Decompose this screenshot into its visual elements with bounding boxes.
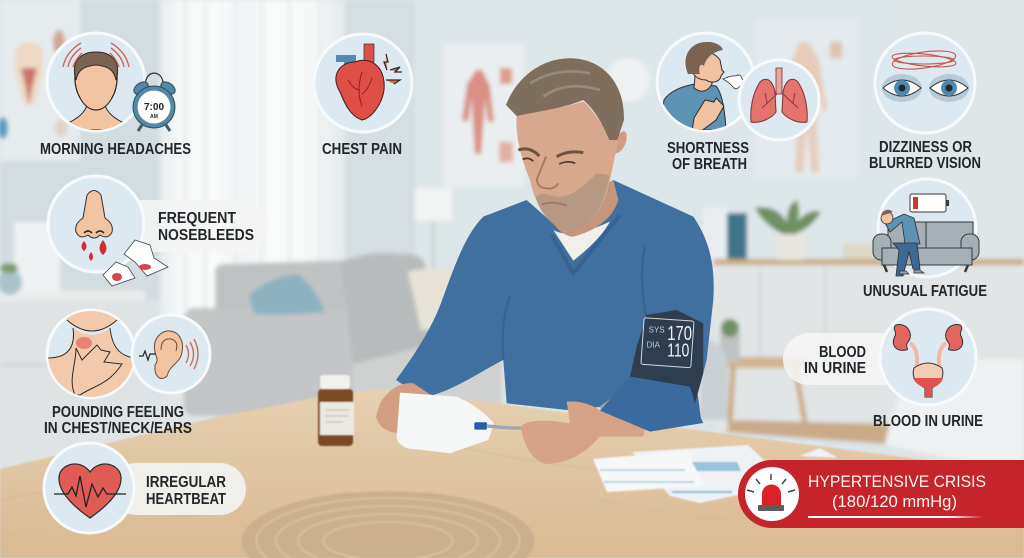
icon: blurred eyes xyxy=(875,33,975,133)
label: MORNING HEADACHES xyxy=(40,141,191,158)
icon: heart with ECG xyxy=(44,443,134,533)
symptom: frequent nosebleeds xyxy=(48,176,268,286)
threshold: (180/120 mmHg) xyxy=(832,493,957,511)
white chair xyxy=(885,359,1024,474)
arm cuff with readout: 110 xyxy=(667,340,689,361)
wooden table xyxy=(0,388,1024,558)
left cabinet xyxy=(0,222,210,470)
hair xyxy=(506,58,624,140)
symptom: morning headaches xyxy=(40,33,191,158)
label: CHEST PAIN xyxy=(322,141,402,158)
icon: lungs xyxy=(739,60,819,140)
icon: ear with pulse xyxy=(132,315,210,393)
ear xyxy=(615,131,627,153)
label: IRREGULAR xyxy=(146,474,227,491)
icon: emergency siren xyxy=(745,467,799,521)
label: POUNDING FEELING xyxy=(52,404,184,421)
symptom: shortness of breath xyxy=(657,33,819,173)
pill label: BLOOD xyxy=(819,344,866,361)
eyebrows and eyes xyxy=(518,149,583,164)
label pill xyxy=(110,463,246,515)
label: FREQUENT xyxy=(158,210,236,227)
banner xyxy=(738,460,1024,528)
side table and small plant xyxy=(700,319,809,434)
shelf and cabinet xyxy=(714,259,1024,434)
left hand xyxy=(376,383,433,433)
pill label: IN URINE xyxy=(804,360,866,377)
pill label xyxy=(804,344,866,377)
icon: alarm clock 7:00: 7:00 xyxy=(144,102,164,113)
sweater V-neck ribbing xyxy=(552,215,620,273)
label xyxy=(158,210,254,244)
books and plant xyxy=(703,200,877,260)
arm cuff with readout: SYS xyxy=(649,326,665,335)
heading: HYPERTENSIVE CRISIS xyxy=(808,472,986,491)
nose and mouth xyxy=(537,157,567,206)
hair highlights xyxy=(530,71,600,97)
man with blood pressure monitor xyxy=(376,58,714,464)
wall clock xyxy=(606,58,650,102)
icon: hand on neck xyxy=(47,305,135,400)
symptom: dizziness or blurred vision xyxy=(869,33,981,172)
callout: hypertensive crisis xyxy=(738,460,1024,528)
arm cuff with readout xyxy=(630,310,703,403)
label pill xyxy=(783,333,900,385)
label pill xyxy=(110,200,268,252)
symptom: irregular heartbeat xyxy=(44,443,246,533)
label: SHORTNESS xyxy=(667,140,749,157)
sweater shading xyxy=(503,247,647,360)
arm cuff with readout: DIA xyxy=(647,340,661,349)
icon: tired person on sofa xyxy=(873,179,979,277)
symptom: unusual fatigue xyxy=(863,179,987,300)
poster: left anatomy xyxy=(0,0,80,161)
label: IN CHEST/NECK/EARS xyxy=(44,420,192,437)
woven placemat xyxy=(241,491,535,558)
icon: man breathing out xyxy=(657,33,755,132)
poster: centre anatomy xyxy=(443,44,525,186)
icon: alarm clock 7:00: AM xyxy=(150,114,158,120)
face xyxy=(516,102,618,231)
floor lamp xyxy=(415,188,452,271)
icon: alarm clock 7:00 xyxy=(132,73,177,131)
symptom: chest pain xyxy=(314,34,412,158)
papers on the table xyxy=(593,445,838,503)
label xyxy=(869,139,981,172)
sweater xyxy=(396,180,714,423)
floor xyxy=(725,420,890,444)
symptom: pounding feeling xyxy=(44,305,210,437)
icon: bloody tissues xyxy=(103,240,168,286)
symptom: blood in urine xyxy=(783,309,983,430)
arm cuff with readout: 170 xyxy=(667,323,692,345)
icon: heart with lightning xyxy=(314,34,412,132)
label xyxy=(667,140,749,173)
t-shirt collar xyxy=(553,222,610,261)
monitor connector xyxy=(474,422,487,430)
icon: nose with blood drops xyxy=(48,176,144,272)
label: HEARTBEAT xyxy=(146,491,226,508)
label: DIZZINESS OR xyxy=(879,139,972,156)
neck xyxy=(547,180,618,237)
label xyxy=(146,474,227,508)
label: NOSEBLEEDS xyxy=(158,227,254,244)
pill bottle xyxy=(318,375,354,446)
label: OF BREATH xyxy=(672,156,747,173)
caption label: BLOOD IN URINE xyxy=(873,413,983,430)
icon: head with pain waves xyxy=(47,33,145,131)
label: UNUSUAL FATIGUE xyxy=(863,283,987,300)
right sleeve xyxy=(600,377,702,432)
poster: right anatomy xyxy=(755,18,857,178)
label: BLURRED VISION xyxy=(869,155,981,172)
stubble xyxy=(536,173,609,231)
air tube xyxy=(487,365,660,428)
label xyxy=(44,404,192,437)
forearm and palm xyxy=(521,401,647,464)
icon: kidneys and bladder xyxy=(880,309,976,405)
monitor unit xyxy=(397,393,494,453)
sofa xyxy=(184,253,502,416)
